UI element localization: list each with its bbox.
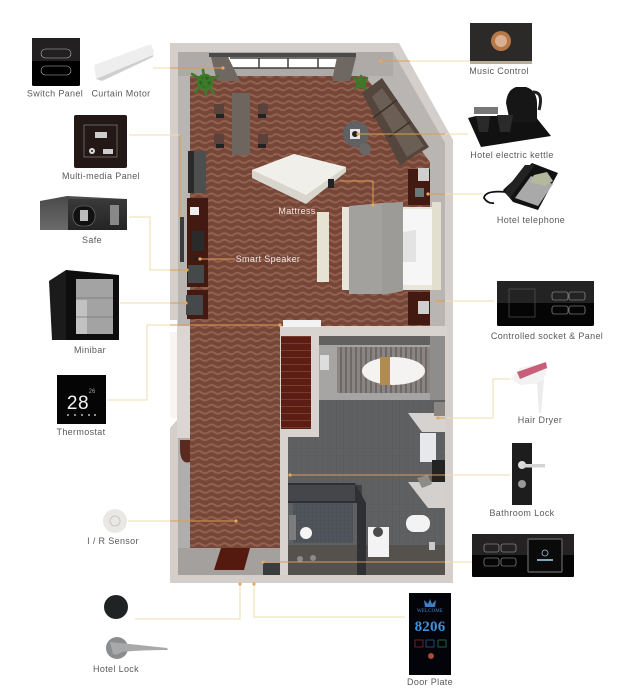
air vent bbox=[283, 320, 321, 327]
hotel electric kettle bbox=[468, 87, 554, 160]
door plate: WELCOME bbox=[417, 609, 443, 614]
dining table and chairs bbox=[214, 93, 268, 155]
shower bbox=[288, 483, 389, 575]
room control panel bbox=[472, 534, 574, 577]
music control: Music Control bbox=[469, 66, 529, 76]
entry floor bbox=[178, 548, 280, 575]
bench bbox=[317, 212, 329, 282]
connector dots bbox=[178, 59, 440, 586]
safe bbox=[40, 196, 127, 245]
mattress bbox=[252, 154, 346, 204]
i/r sensor bbox=[87, 509, 139, 546]
vanity counters bbox=[408, 402, 445, 508]
safe: Safe bbox=[82, 235, 102, 245]
controlled socket & panel: Controlled socket & Panel bbox=[491, 331, 603, 341]
media console bbox=[188, 151, 206, 193]
switch panel: Switch Panel bbox=[27, 88, 83, 98]
door plate bbox=[407, 593, 453, 687]
minibar: Minibar bbox=[74, 345, 106, 355]
hotel lock: Hotel Lock bbox=[93, 664, 139, 674]
curtain motor bbox=[91, 44, 154, 98]
multi-media panel: Multi-media Panel bbox=[62, 171, 140, 181]
carpet bbox=[190, 76, 430, 548]
hotel electric kettle: Hotel electric kettle bbox=[470, 150, 554, 160]
bathroom lock bbox=[489, 443, 555, 518]
nightstands bbox=[408, 168, 430, 325]
left corridor side wall bbox=[178, 438, 190, 575]
plants bbox=[192, 70, 367, 95]
bathroom tile floor bbox=[288, 400, 445, 575]
room labels bbox=[236, 206, 316, 264]
hotel telephone bbox=[484, 163, 565, 225]
hair dryer: Hair Dryer bbox=[518, 415, 562, 425]
bathroom upper bbox=[319, 336, 445, 401]
room labels: Smart Speaker bbox=[236, 254, 300, 264]
door plate: Door Plate bbox=[407, 677, 453, 687]
wooden wardrobe bbox=[281, 336, 311, 429]
multi-media panel bbox=[62, 115, 140, 181]
minibar bbox=[49, 270, 119, 355]
outer walls bbox=[170, 43, 453, 583]
i/r sensor: I / R Sensor bbox=[87, 536, 139, 546]
room labels: Mattress bbox=[278, 206, 316, 216]
alcove wall bbox=[170, 320, 209, 438]
wall: bathroom partition bbox=[280, 326, 447, 575]
bottom slippers bbox=[297, 555, 316, 562]
desk bbox=[180, 198, 208, 319]
corridor door bbox=[180, 440, 190, 462]
thermostat bbox=[56, 375, 106, 437]
music control bbox=[469, 23, 532, 76]
sofa bbox=[362, 78, 429, 165]
connector lines: interior bbox=[170, 61, 445, 562]
toilet bbox=[406, 515, 435, 550]
bottom wall bbox=[170, 575, 453, 583]
bathtub bbox=[362, 357, 425, 385]
thermostat: Thermostat bbox=[56, 427, 106, 437]
hotel lock bbox=[93, 595, 168, 674]
thermostat: 26 bbox=[89, 389, 96, 395]
switch panel bbox=[27, 38, 83, 98]
curtain motor: Curtain Motor bbox=[91, 88, 151, 98]
bedroom room walls bbox=[178, 52, 445, 326]
hotel telephone: Hotel telephone bbox=[497, 215, 565, 225]
floor plan bbox=[170, 43, 453, 583]
thermostat: 28 bbox=[67, 393, 89, 414]
bathroom lock: Bathroom Lock bbox=[489, 508, 555, 518]
controlled socket & panel bbox=[491, 281, 603, 341]
connector lines: exterior bbox=[107, 61, 510, 619]
door plate: 8206 bbox=[415, 619, 446, 635]
window wall bbox=[178, 52, 393, 76]
curtains bbox=[211, 57, 356, 81]
hair dryer bbox=[511, 362, 562, 425]
bed bbox=[342, 202, 441, 295]
round coffee table bbox=[343, 121, 371, 155]
